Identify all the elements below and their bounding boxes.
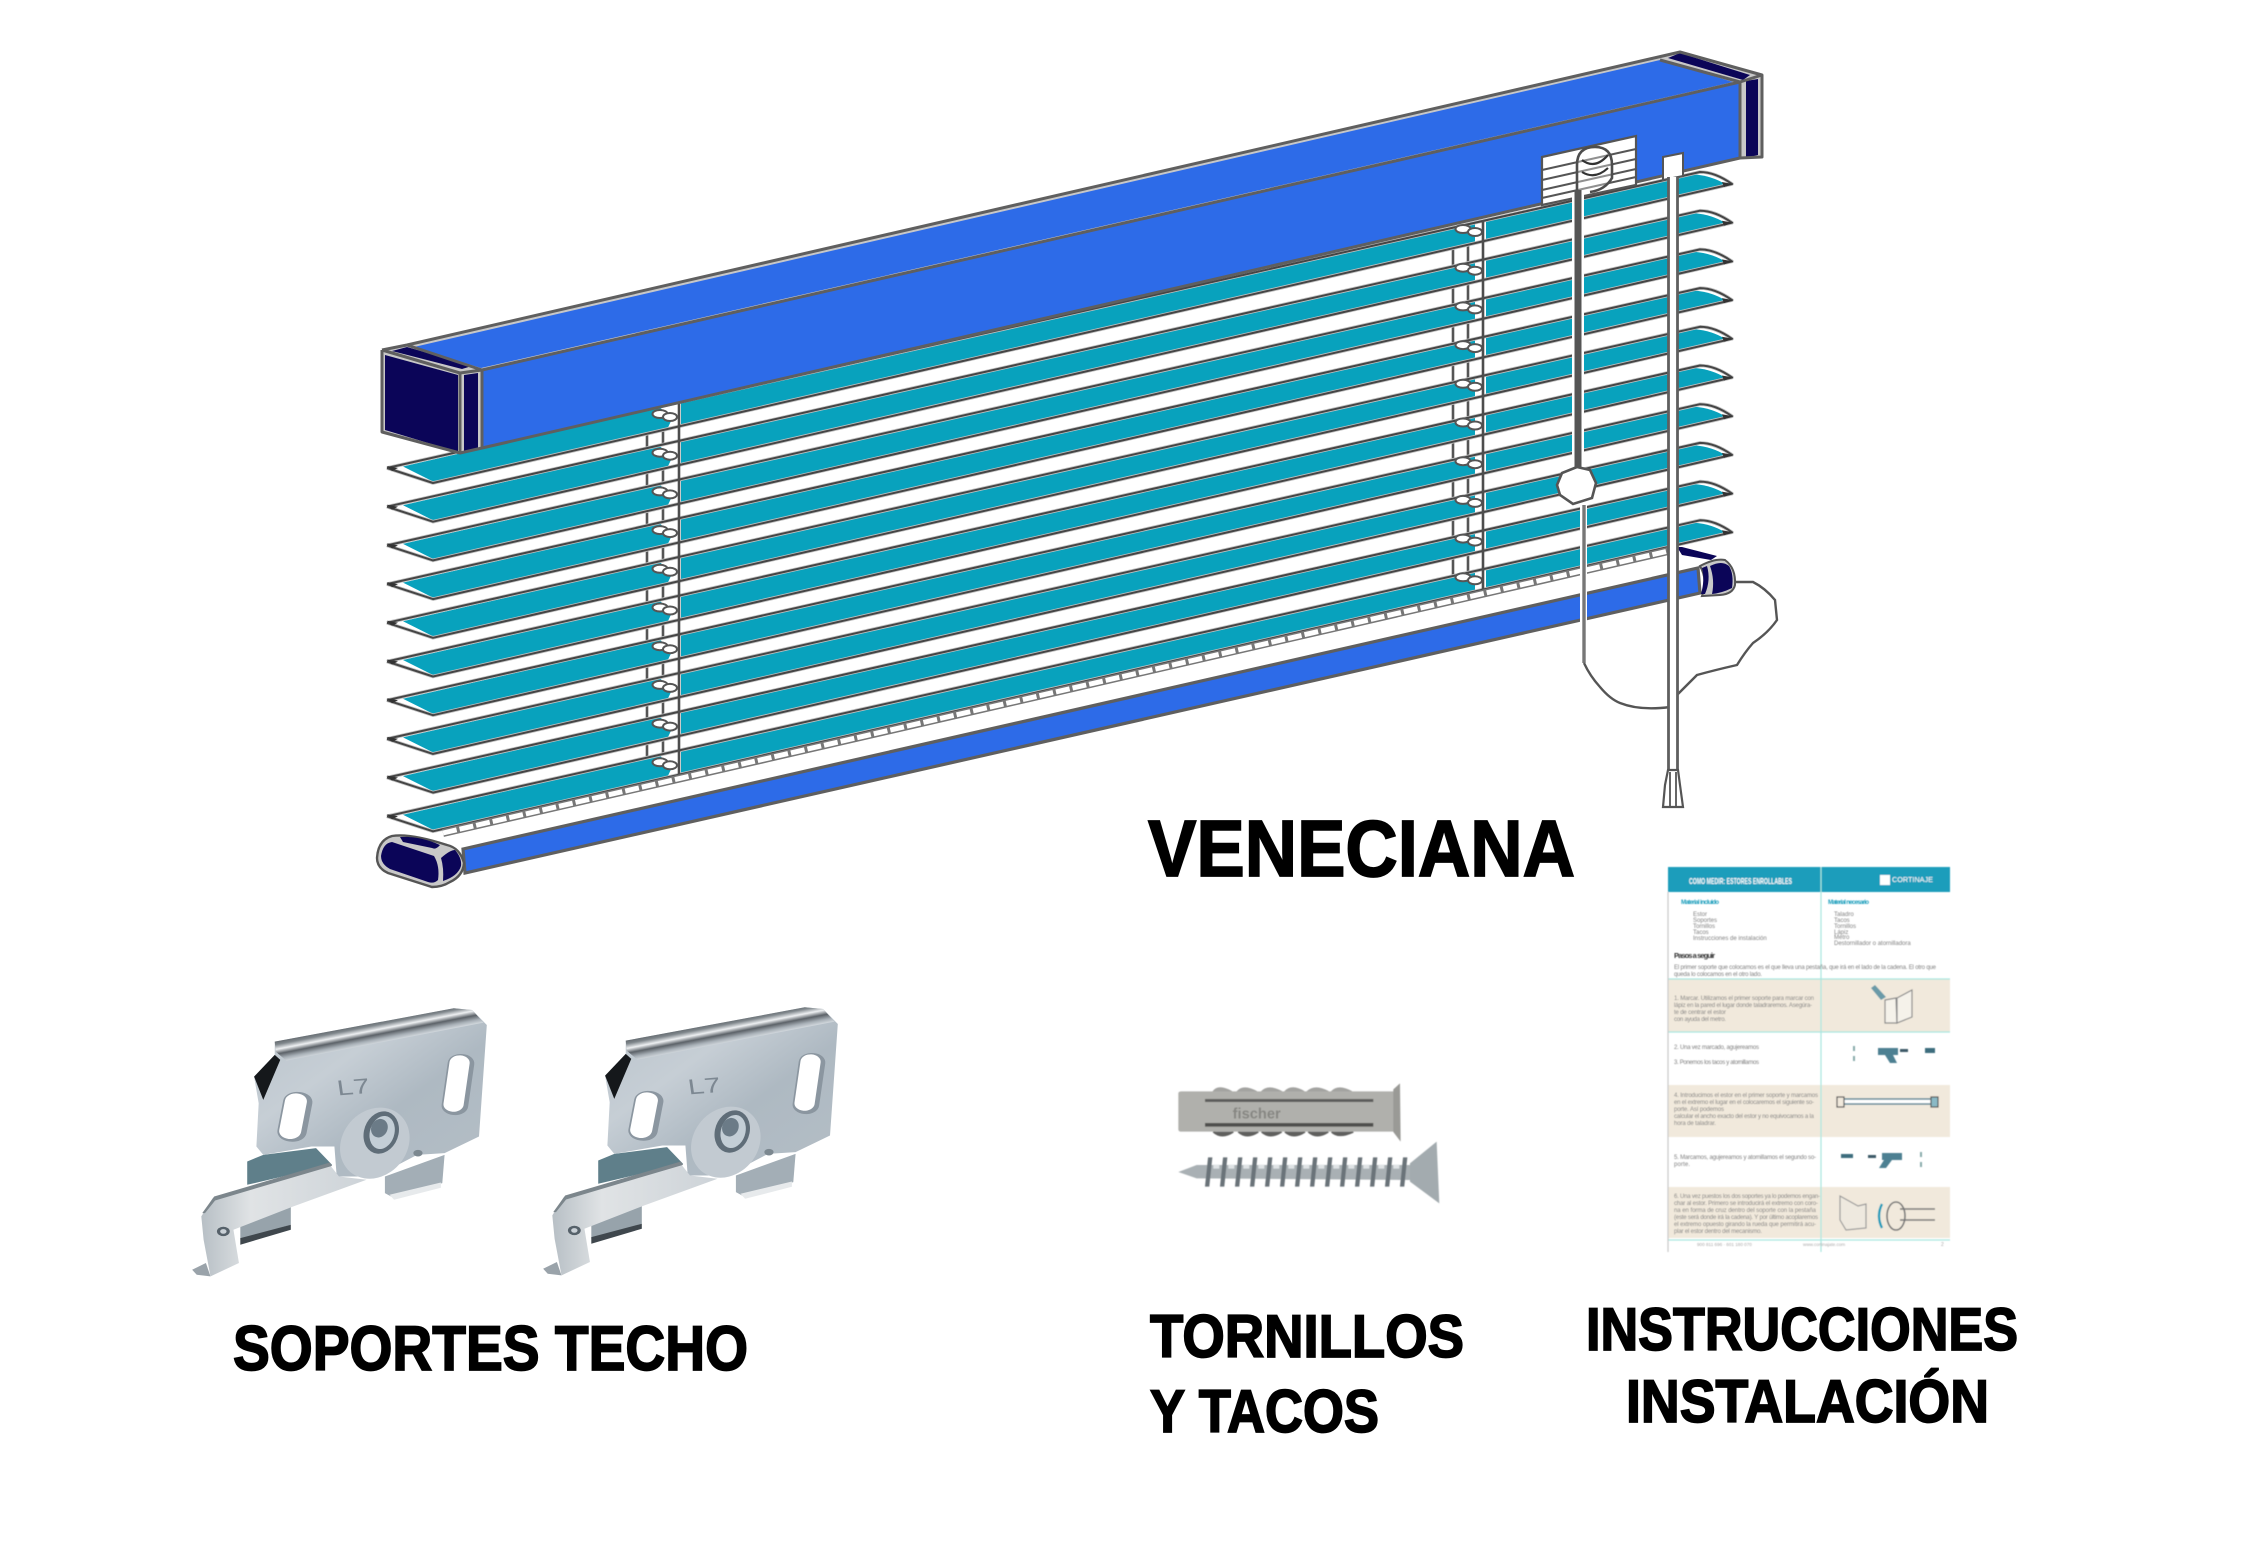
step 5 <box>1674 1152 1922 1168</box>
materials lists: Tacos <box>1693 930 1709 936</box>
materials lists: Soportes <box>1693 918 1717 924</box>
materials lists: Material necesario <box>1828 899 1869 906</box>
sheet guide lines <box>1668 867 1950 1252</box>
label: TORNILLOS Y TACOS: Y TACOS <box>1150 1378 1379 1445</box>
beige step bands <box>1668 979 1950 1238</box>
materials lists: Lápiz <box>1834 930 1848 936</box>
materials lists: Metro <box>1834 935 1850 941</box>
materials lists <box>1681 899 1911 947</box>
wall plug <box>1178 1083 1401 1142</box>
steps heading: Pasos a seguir <box>1674 951 1715 960</box>
title: VENECIANA: VENECIANA <box>1148 804 1575 893</box>
steps 2 and 3 <box>1674 1045 1935 1066</box>
ladder strings behind the slats <box>647 230 1468 795</box>
intro paragraph: queda lo colocamos en el otro lado. <box>1674 972 1762 978</box>
sheet footer: 2 <box>1941 1242 1944 1248</box>
step 1 <box>1674 985 1912 1023</box>
steps 2 and 3: 3. Ponemos los tacos y atornillamos <box>1674 1060 1759 1066</box>
sheet header: COMO MEDIR: ESTORES ENROLLABLES <box>1689 876 1792 886</box>
label: TORNILLOS Y TACOS <box>1150 1303 1464 1445</box>
step 1: con ayuda del metro. <box>1674 1017 1726 1023</box>
tilt cord <box>1572 190 1584 470</box>
step 5: porte. <box>1674 1162 1690 1168</box>
label: INSTRUCCIONES INSTALACIÓN <box>1586 1296 2018 1435</box>
slats <box>387 172 1733 831</box>
step 4: 4. Introducimos el estor en el primer soporte y marcamos <box>1674 1093 1818 1099</box>
tilt mechanism grille <box>1542 136 1636 205</box>
ceiling bracket left <box>192 1008 487 1276</box>
label: INSTRUCCIONES INSTALACIÓN: INSTRUCCIONES <box>1586 1296 2018 1363</box>
headrail <box>382 52 1762 453</box>
step 6: plar el estor dentro del mecanismo. <box>1674 1229 1762 1235</box>
materials lists: Tacos <box>1834 918 1850 924</box>
materials lists: Taladro <box>1834 912 1854 918</box>
ceiling bracket right <box>543 1007 838 1275</box>
steps 2 and 3: 2. Una vez marcado, agujereamos <box>1674 1045 1759 1051</box>
sheet header: CORTINAJE <box>1892 875 1933 884</box>
venetian blind diagram <box>377 52 1777 887</box>
step 4: hora de taladrar. <box>1674 1121 1716 1127</box>
materials lists: Tornillos <box>1834 924 1856 930</box>
step 1: lápiz en la pared el lugar donde taladraremos. Asegúra- <box>1674 1003 1812 1009</box>
bottom rail <box>377 547 1735 887</box>
step 6: (este será donde irá la cadena). Y por último acoplaremos <box>1674 1215 1818 1221</box>
instruction sheet <box>1668 867 1950 1252</box>
step 4: porte. Así podemos <box>1674 1107 1724 1113</box>
label: INSTRUCCIONES INSTALACIÓN: INSTALACIÓN <box>1626 1368 1989 1435</box>
step 5: 5. Marcamos, agujereamos y atornillamos el segundo so- <box>1674 1155 1816 1161</box>
screw <box>1178 1142 1439 1203</box>
step 6: na en forma de cruz dentro del soporte con la pestaña <box>1674 1208 1817 1214</box>
sheet header <box>1668 867 1950 892</box>
materials lists: Destornillador o atornilladora <box>1834 941 1911 947</box>
step 6: el extremo opuesto girando la rueda que permitirá acu- <box>1674 1222 1816 1228</box>
sheet footer: www.cortinajate.com <box>1803 1242 1845 1247</box>
label: SOPORTES TECHO: SOPORTES TECHO <box>233 1314 748 1384</box>
step 4: en el extremo el lugar en el colocaremos el siguiente so- <box>1674 1100 1814 1106</box>
cord knob <box>1557 467 1596 504</box>
materials lists: Instrucciones de instalación <box>1693 936 1767 942</box>
wall plug: fischer <box>1233 1106 1281 1122</box>
wand notch <box>1663 153 1683 180</box>
step 1: 1. Marcar. Utilizamos el primer soporte para marcar con <box>1674 996 1814 1002</box>
step 1: te de centrar el estor <box>1674 1010 1726 1016</box>
materials lists: Tornillos <box>1693 924 1715 930</box>
wall plug and screw <box>1178 1083 1439 1203</box>
tilt wand <box>1663 177 1683 807</box>
step 4: calcular el ancho exacto del estor y no equivocarnos a la <box>1674 1114 1815 1120</box>
materials lists: Estor <box>1693 912 1707 918</box>
step 6: 6. Una vez puestos los dos soportes ya lo podemos engan- <box>1674 1194 1820 1200</box>
intro paragraph: El primer soporte que colocamos es el que lleva una pestaña, que irá en el lado de la cadena. El otro que <box>1674 965 1937 971</box>
label: TORNILLOS Y TACOS: TORNILLOS <box>1150 1303 1464 1370</box>
sheet footer <box>1697 1242 1944 1248</box>
step 4 <box>1674 1093 1938 1127</box>
pull cord loop <box>1580 505 1777 708</box>
ladder front strings <box>642 220 1483 800</box>
step 6 <box>1674 1194 1935 1235</box>
intro paragraph <box>1674 965 1937 978</box>
sheet footer: 900 811 696 · 601 180 070 <box>1697 1242 1752 1247</box>
materials lists: Material incluido <box>1681 899 1719 906</box>
step 6: char al estor. Primero se introducirá el extremo con coro- <box>1674 1201 1818 1207</box>
